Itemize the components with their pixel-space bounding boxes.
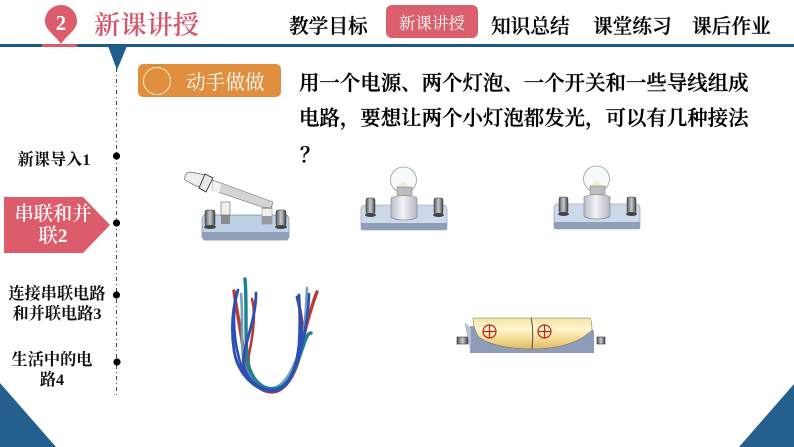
sidebar item 4: 生活中的电 [12, 351, 92, 369]
sidebar item 4: 路4 [40, 371, 64, 389]
nav: practice: 课堂练习 [593, 16, 672, 38]
sidebar active item: 串联和并 [14, 204, 92, 225]
sidebar item 3: 连接串联电路 [8, 285, 106, 303]
nav: summary: 知识总结 [491, 16, 570, 38]
nav: teaching goals: 教学目标 [289, 16, 368, 38]
icon: section number pin: 2 [56, 11, 66, 35]
nav: active tab: 新课讲授 [399, 14, 465, 33]
sidebar item 1: 新课导入1 [18, 151, 90, 169]
title: 新课讲授 [94, 11, 199, 40]
sidebar item 3: 和并联电路3 [12, 305, 102, 323]
sidebar item 3 [8, 284, 106, 323]
question text: 电路，要想让两个小灯泡都发光，可以有几种接法 [299, 108, 749, 130]
sidebar active item: 联2 [39, 226, 67, 247]
sidebar active item [4, 197, 110, 253]
nav: homework: 课后作业 [692, 16, 771, 38]
nav: active tab [386, 5, 478, 38]
sidebar item 4 [12, 350, 92, 389]
activity badge: 动手做做 [186, 72, 265, 94]
question text: ？ [300, 145, 320, 167]
question text [299, 72, 749, 167]
activity badge [138, 64, 281, 97]
question text: 用一个电源、两个灯泡、一个开关和一些导线组成 [299, 73, 749, 95]
